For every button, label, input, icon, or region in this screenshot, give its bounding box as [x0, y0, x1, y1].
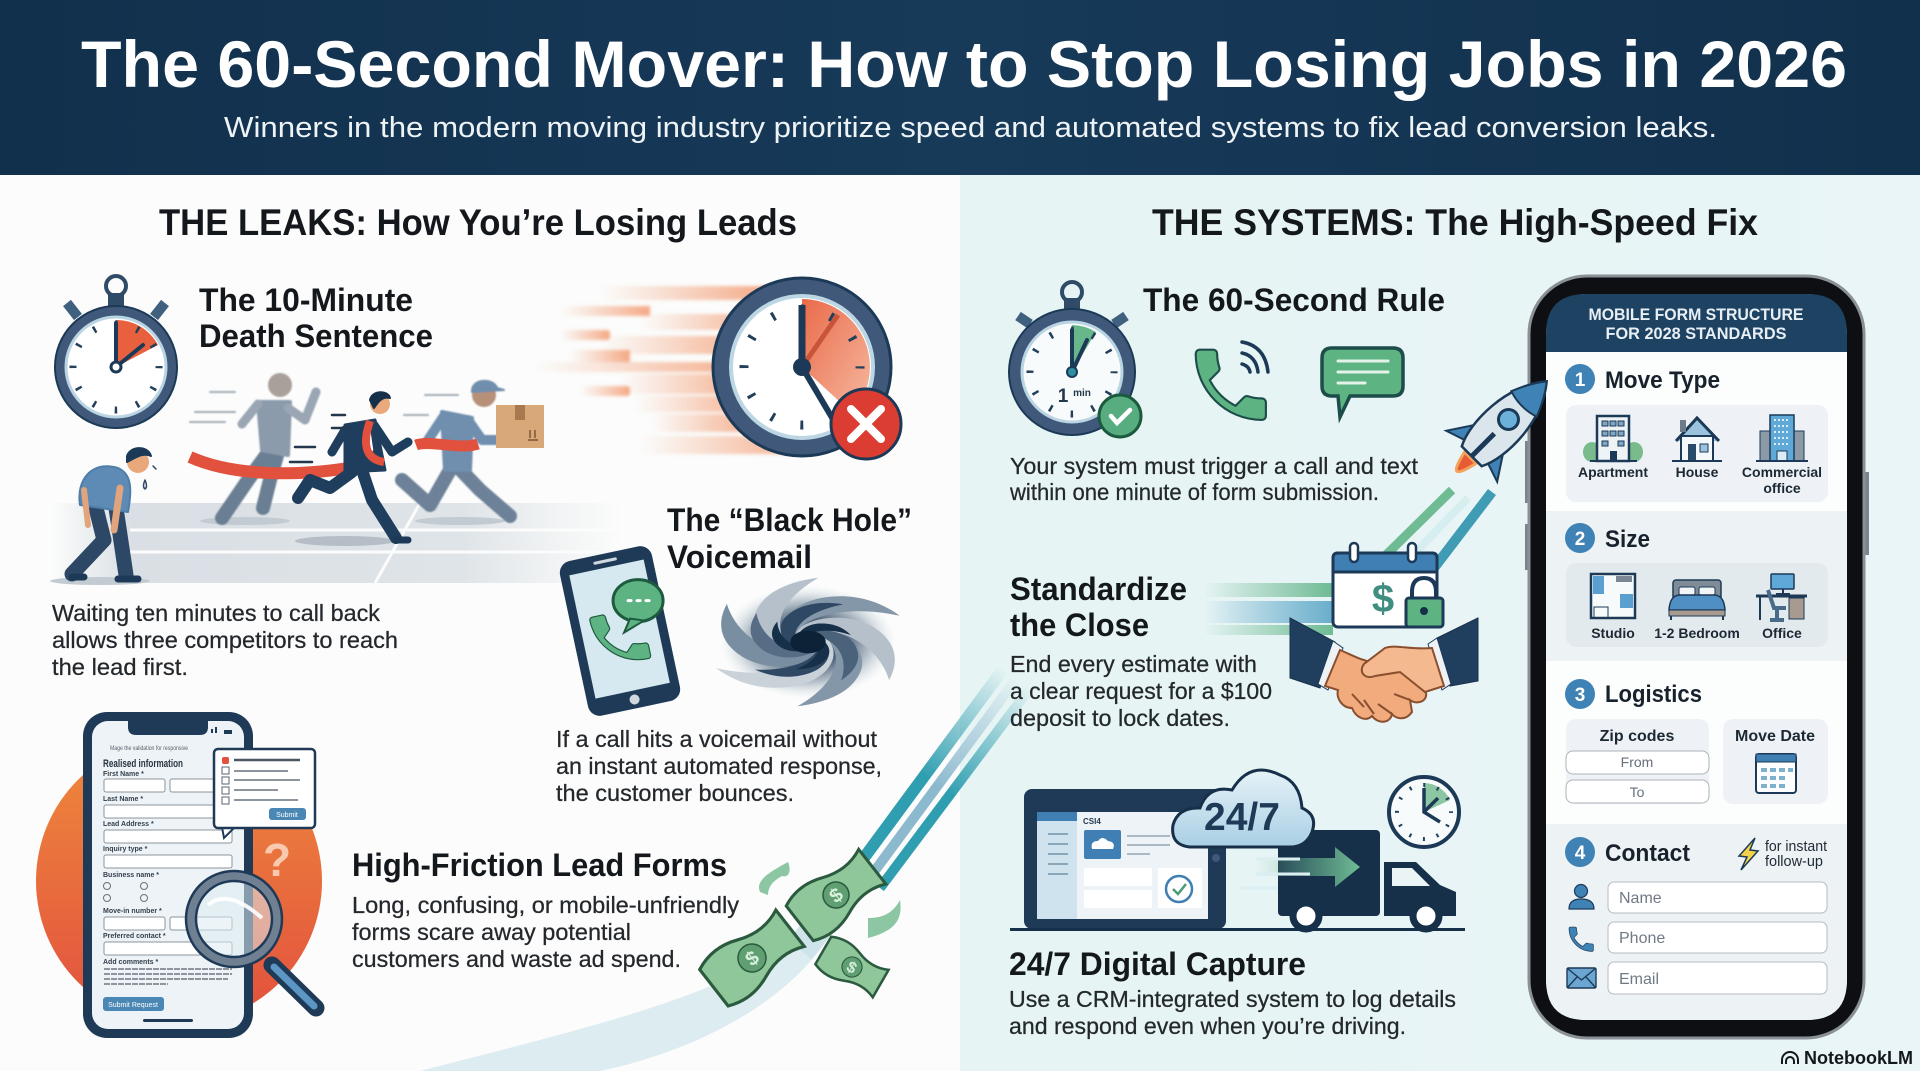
icon: text message: [1322, 348, 1403, 417]
icon: crm tablet: [1024, 789, 1226, 929]
icon: finish tape and suited runner: [190, 392, 478, 540]
icon: flying money: $: [825, 884, 848, 908]
subtitle: Winners in the modern moving industry prioritize speed and automated systems to fix lead conversion leaks.: [224, 112, 1717, 144]
icon: crm tablet: CSI4: [1083, 817, 1101, 826]
section 4: contact: for instant: [1765, 839, 1827, 855]
icon: delivery runner with box: [402, 381, 510, 516]
text: 60-second description: [1009, 453, 1419, 505]
icon: green stopwatch: min: [1073, 388, 1091, 399]
heading: the systems: THE SYSTEMS: The High-Speed Fix: [1152, 202, 1758, 243]
icon: flying money: $: [843, 959, 860, 978]
icon: phone handset: [1569, 927, 1593, 951]
icon: form popup checklist: [214, 749, 315, 838]
icon: tired man: [72, 448, 156, 579]
icon: flying money: [696, 845, 901, 1010]
phone mockup: mobile form: [1525, 276, 1869, 1038]
section 3: logistics: 3: [1575, 685, 1585, 706]
text: capture description: Use a CRM-integrated system to log details: [1009, 986, 1456, 1012]
icon: money stream: [420, 668, 1030, 1071]
heading: standardize the close: Standardize: [1010, 571, 1187, 607]
text: capture description: [1009, 986, 1456, 1039]
text: voicemail description: the customer bounces.: [556, 780, 794, 806]
icon: magnifying glass: [186, 871, 316, 1008]
icon: house: [1672, 418, 1722, 461]
section 3: logistics: From: [1621, 754, 1653, 770]
heading: 10-minute: Death Sentence: [199, 318, 433, 354]
section 2: size: Size: [1605, 526, 1650, 553]
section 2: size: 2: [1575, 529, 1585, 550]
header banner: [0, 0, 1920, 175]
text: voicemail description: [556, 726, 882, 806]
section 3: logistics: Zip codes: [1600, 728, 1674, 745]
icon: tilted phone: [558, 543, 688, 718]
section 4: contact: Email: [1619, 971, 1659, 988]
section 1: move type: office: [1763, 480, 1801, 496]
section 3: logistics: Logistics: [1605, 681, 1702, 708]
heading: 24/7 digital capture: 24/7 Digital Capture: [1009, 946, 1306, 982]
icon: complicated form phone: [83, 712, 253, 1038]
text: close description: a clear request for a $100: [1010, 678, 1272, 704]
track: [50, 503, 622, 585]
icon: green stopwatch: [1009, 282, 1141, 437]
section 3: logistics: To: [1630, 784, 1645, 800]
section 2: size: [1546, 511, 1847, 661]
section 2: size: Office: [1762, 625, 1802, 641]
phone header: [1546, 294, 1847, 352]
icon: cardboard box: [496, 405, 544, 448]
icon: orange circle behind form: [36, 738, 322, 1024]
heading: high-friction lead forms: High-Friction Lead Forms: [352, 847, 727, 883]
section 4: contact: 4: [1575, 843, 1586, 864]
icon: complicated form phone: Inquiry type *: [103, 846, 148, 853]
section 4: contact: follow-up: [1765, 854, 1823, 870]
icon: office desk: [1756, 574, 1807, 620]
icon: green stopwatch: 1: [1058, 386, 1069, 407]
phone header: FOR 2028 STANDARDS: [1606, 324, 1786, 343]
icon: lightning bolt: [1739, 838, 1758, 870]
icon: delivery truck: [1240, 830, 1456, 929]
title: The 60-Second Mover: How to Stop Losing Jobs in 2026: [81, 27, 1847, 101]
icon: grey runner: [190, 373, 316, 518]
icon: complicated form phone: Business name *: [103, 872, 159, 879]
text: 10-minute description: [52, 600, 398, 680]
icon: small calendar: [1756, 754, 1796, 793]
section 1: move type: Move Type: [1605, 367, 1720, 394]
text: 10-minute description: Waiting ten minutes to call back: [52, 600, 381, 626]
background: left panel: [0, 175, 960, 1071]
icon: person: [1569, 884, 1594, 909]
icon: handshake: [1290, 618, 1478, 722]
icon: deposit calendar with lock: [1333, 543, 1443, 627]
text: 60-second description: Your system must trigger a call and text: [1010, 453, 1419, 479]
section 4: contact: [1546, 824, 1847, 1020]
icon: rocket: [1431, 356, 1572, 497]
icon: speed bands: [1203, 583, 1333, 635]
icon: question mark: ?: [263, 834, 291, 886]
icon: 24/7 cloud: [1173, 770, 1314, 847]
icon: phone ringing: [1196, 342, 1268, 420]
arrow: rocket trail: [1385, 490, 1492, 568]
icon: 24/7 cloud: 24/7: [1204, 796, 1280, 839]
section 2: size: Studio: [1591, 625, 1635, 641]
text: lead form description: [352, 892, 740, 972]
text: lead form description: forms scare away potential: [352, 919, 631, 945]
icon: complicated form phone: Submit Request: [108, 1002, 158, 1009]
text: voicemail description: an instant automated response,: [556, 753, 882, 779]
icon: envelope: [1567, 968, 1596, 988]
background: right panel: [960, 175, 1920, 1071]
icon: form popup checklist: Submit: [276, 812, 298, 819]
icon: commercial building: [1756, 415, 1808, 461]
text: capture description: and respond even when you’re driving.: [1009, 1013, 1406, 1039]
icon: apartment: [1583, 416, 1643, 462]
heading: 10-minute: The 10-Minute: [199, 282, 413, 318]
icon: complicated form phone: Lead Address *: [103, 821, 154, 828]
text: voicemail description: If a call hits a voicemail without: [556, 726, 878, 752]
icon: red stopwatch: [55, 276, 177, 428]
heading: the leaks: THE LEAKS: How You’re Losing Leads: [159, 202, 797, 243]
text: close description: [1010, 651, 1272, 731]
heading: black hole voicemail: Voicemail: [667, 539, 812, 575]
heading: black hole voicemail: [667, 502, 912, 575]
text: close description: deposit to lock dates.: [1010, 705, 1230, 731]
heading: black hole voicemail: The “Black Hole”: [667, 502, 912, 538]
logo: NotebookLM: NotebookLM: [1804, 1048, 1913, 1068]
icon: complicated form phone: First Name *: [103, 771, 144, 778]
icon: complicated form phone: Move-in number *: [103, 908, 162, 915]
section 3: logistics: Move Date: [1735, 728, 1815, 745]
section 1: move type: [1546, 352, 1847, 511]
icon: complicated form phone: Last Name *: [103, 796, 143, 803]
section 1: move type: 1: [1575, 370, 1586, 391]
icon: complicated form phone: Add comments *: [103, 959, 159, 966]
section 4: contact: Name: [1619, 890, 1662, 907]
heading: standardize the close: [1010, 571, 1187, 643]
icon: complicated form phone: Preferred contact *: [103, 933, 166, 940]
heading: standardize the close: the Close: [1010, 607, 1149, 643]
icon: complicated form phone: Mage the validation for responsive: [110, 746, 189, 752]
icon: small clock: [1389, 777, 1459, 847]
icon: bed: [1669, 580, 1725, 620]
text: lead form description: Long, confusing, or mobile-unfriendly: [352, 892, 740, 918]
icon: black hole: [713, 575, 903, 709]
icon: deposit calendar with lock: $: [1372, 577, 1394, 621]
icon: flying money: $: [741, 947, 764, 971]
heading: 10-minute: [199, 282, 433, 354]
icon: studio floorplan: [1591, 574, 1635, 618]
section 1: move type: Apartment: [1578, 464, 1648, 480]
section 2: size: 1-2 Bedroom: [1654, 625, 1740, 641]
section 3: logistics: [1546, 661, 1847, 824]
section 1: move type: Commercial: [1742, 464, 1822, 480]
text: 60-second description: within one minute of form submission.: [1009, 479, 1379, 505]
text: 10-minute description: the lead first.: [52, 654, 188, 680]
text: lead form description: customers and waste ad spend.: [352, 946, 681, 972]
icon: speed lines: [535, 286, 810, 454]
section 1: move type: House: [1676, 464, 1719, 480]
icon: big clock with x: [713, 278, 901, 459]
phone header: MOBILE FORM STRUCTURE: [1588, 305, 1804, 324]
ground line: [1010, 928, 1465, 931]
heading: 60-second rule: The 60-Second Rule: [1143, 282, 1445, 318]
text: 10-minute description: allows three competitors to reach: [52, 627, 398, 653]
section 4: contact: Contact: [1605, 840, 1690, 867]
text: close description: End every estimate with: [1010, 651, 1257, 677]
section 4: contact: Phone: [1619, 930, 1665, 947]
icon: complicated form phone: Realised information: [103, 758, 183, 770]
